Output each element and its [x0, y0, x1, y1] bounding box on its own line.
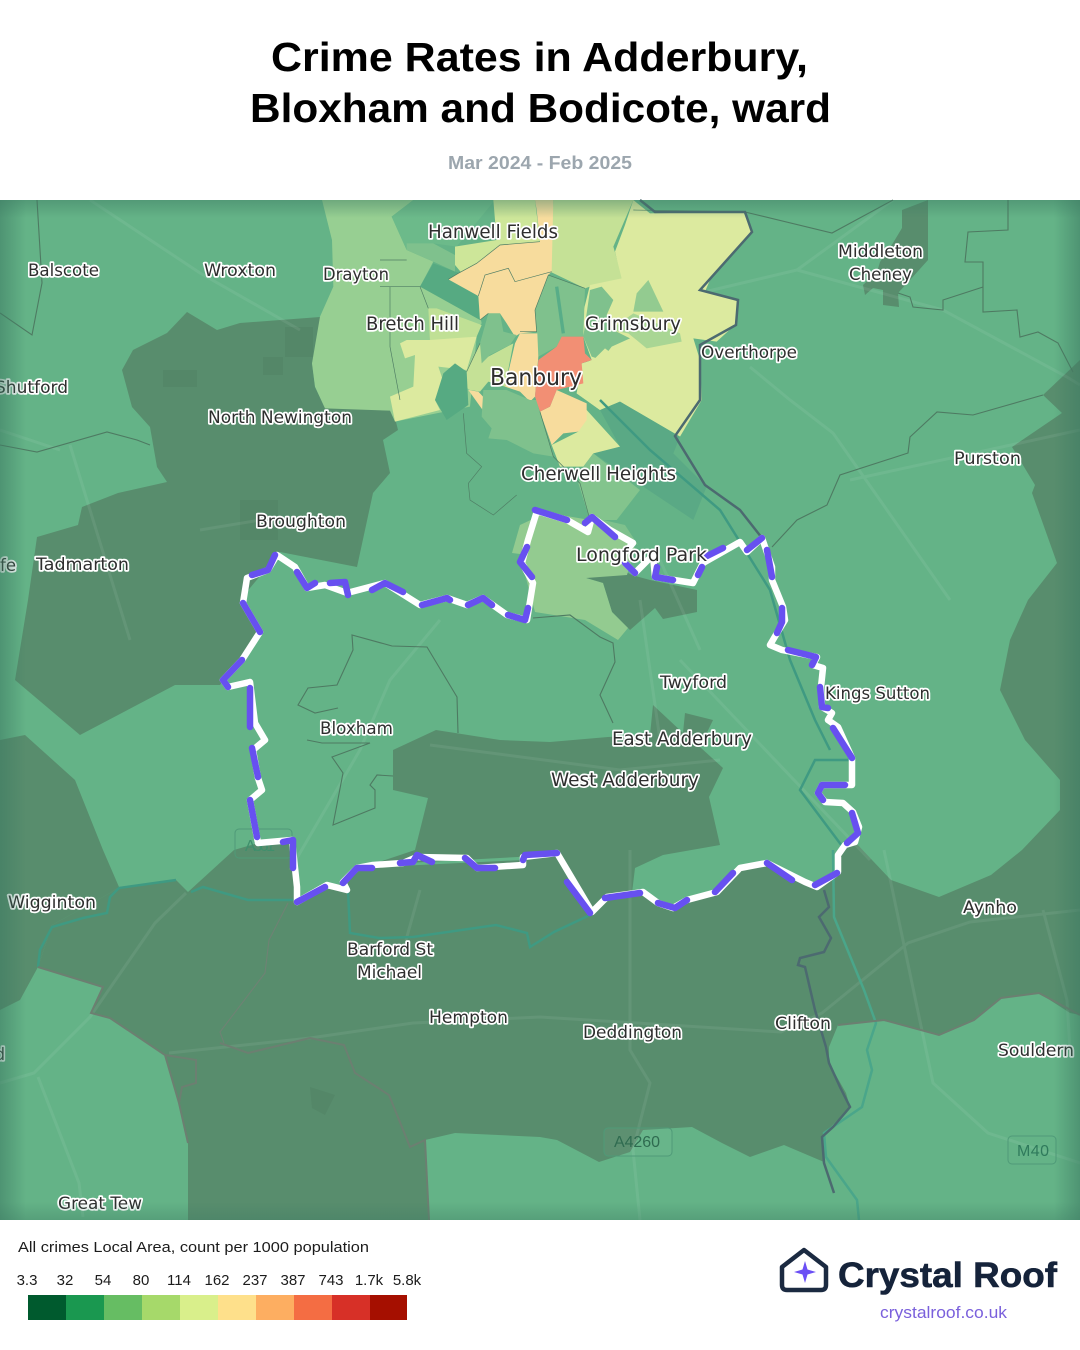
place labels: Longford Park: [576, 544, 707, 566]
legend title: All crimes Local Area, count per 1000 population: [18, 1239, 369, 1256]
ward interior light green area: [522, 511, 635, 640]
road sign: M40: M40: [1017, 1143, 1049, 1160]
legend value labels: 743: [318, 1272, 344, 1289]
map: [0, 200, 1080, 1220]
logo icon: house with star: [782, 1250, 826, 1290]
place labels: Barford St: [347, 940, 433, 960]
subtitle: date range: Mar 2024 - Feb 2025: [448, 153, 632, 173]
boundary purple dashes: [223, 510, 858, 913]
legend value labels: 54: [95, 1272, 111, 1289]
boundary white outline: [223, 511, 859, 912]
place labels: Great Tew: [58, 1194, 142, 1214]
legend value labels: [17, 1272, 422, 1289]
thin boundary lines: [0, 200, 1073, 1043]
place labels: Overthorpe: [701, 343, 797, 363]
place labels: Balscote: [28, 261, 99, 281]
ward boundary: [223, 510, 859, 913]
place labels: Twyford: [659, 673, 727, 693]
road sign: A4260: A4260: [614, 1134, 660, 1151]
road labels: [235, 829, 1056, 1164]
title: Bloxham and Bodicote, ward: [250, 85, 831, 131]
place labels: Michael: [357, 963, 422, 983]
darker field patches: [163, 327, 335, 1115]
place labels: East Adderbury: [612, 728, 752, 750]
legend value labels: 1.7k: [355, 1272, 384, 1289]
legend value labels: 387: [280, 1272, 306, 1289]
place labels: Aynho: [963, 898, 1017, 918]
road sign: M40: [1008, 1136, 1056, 1164]
place labels: Tadmarton: [35, 555, 129, 575]
place labels: Kings Sutton: [825, 684, 930, 704]
outer light green ring: [312, 200, 482, 422]
county boundary: [640, 200, 850, 1193]
Banbury choropleth areas: [312, 200, 752, 520]
place labels: Hempton: [429, 1008, 508, 1028]
place labels: Purston: [954, 449, 1021, 469]
legend value labels: 5.8k: [393, 1272, 422, 1289]
footer panel: [0, 1220, 1080, 1350]
legend value labels: 237: [242, 1272, 268, 1289]
map base: medium green area: [0, 200, 1080, 1220]
place labels: Drayton: [323, 265, 389, 285]
legend value labels: 162: [204, 1272, 230, 1289]
road sign: A4260: [604, 1128, 672, 1156]
place labels: fe: [0, 556, 16, 576]
place labels: North Newington: [208, 408, 352, 428]
place labels: Middleton: [838, 242, 923, 262]
legend value labels: 32: [57, 1272, 73, 1289]
road sign: A361: [235, 829, 292, 858]
place labels: Banbury: [490, 365, 582, 391]
place labels: Cheney: [849, 265, 912, 285]
road sign: A361: A361: [245, 838, 275, 855]
logo wordmark: Crystal Roof: [838, 1256, 1057, 1295]
place labels: Deddington: [583, 1023, 682, 1043]
map edge shading: [0, 200, 1080, 1220]
title: [250, 34, 831, 131]
legend value labels: 114: [167, 1272, 191, 1289]
place labels: Clifton: [775, 1014, 831, 1034]
minor roads: [0, 200, 1080, 1220]
legend value labels: 80: [133, 1272, 149, 1289]
website url: crystalroof.co.uk: [880, 1304, 1008, 1322]
place labels: Wroxton: [204, 261, 276, 281]
place labels: Bloxham: [320, 719, 393, 739]
rivers: [38, 400, 876, 1220]
place labels: Cherwell Heights: [521, 463, 676, 485]
place labels: West Adderbury: [551, 769, 699, 791]
district boundary lines: [38, 967, 1080, 1220]
place labels: Hanwell Fields: [428, 221, 558, 243]
legend colour scale: [28, 1295, 407, 1320]
place labels: Bretch Hill: [366, 313, 459, 335]
dark crime-rate areas: [0, 200, 1080, 1220]
title: Crime Rates in Adderbury,: [271, 34, 808, 80]
place labels: Broughton: [256, 512, 346, 532]
place labels: Wigginton: [8, 893, 96, 913]
place labels: [0, 221, 1074, 1214]
place labels: Souldern: [998, 1041, 1074, 1061]
legend value labels: 3.3: [17, 1272, 37, 1289]
place labels: Grimsbury: [585, 313, 681, 335]
